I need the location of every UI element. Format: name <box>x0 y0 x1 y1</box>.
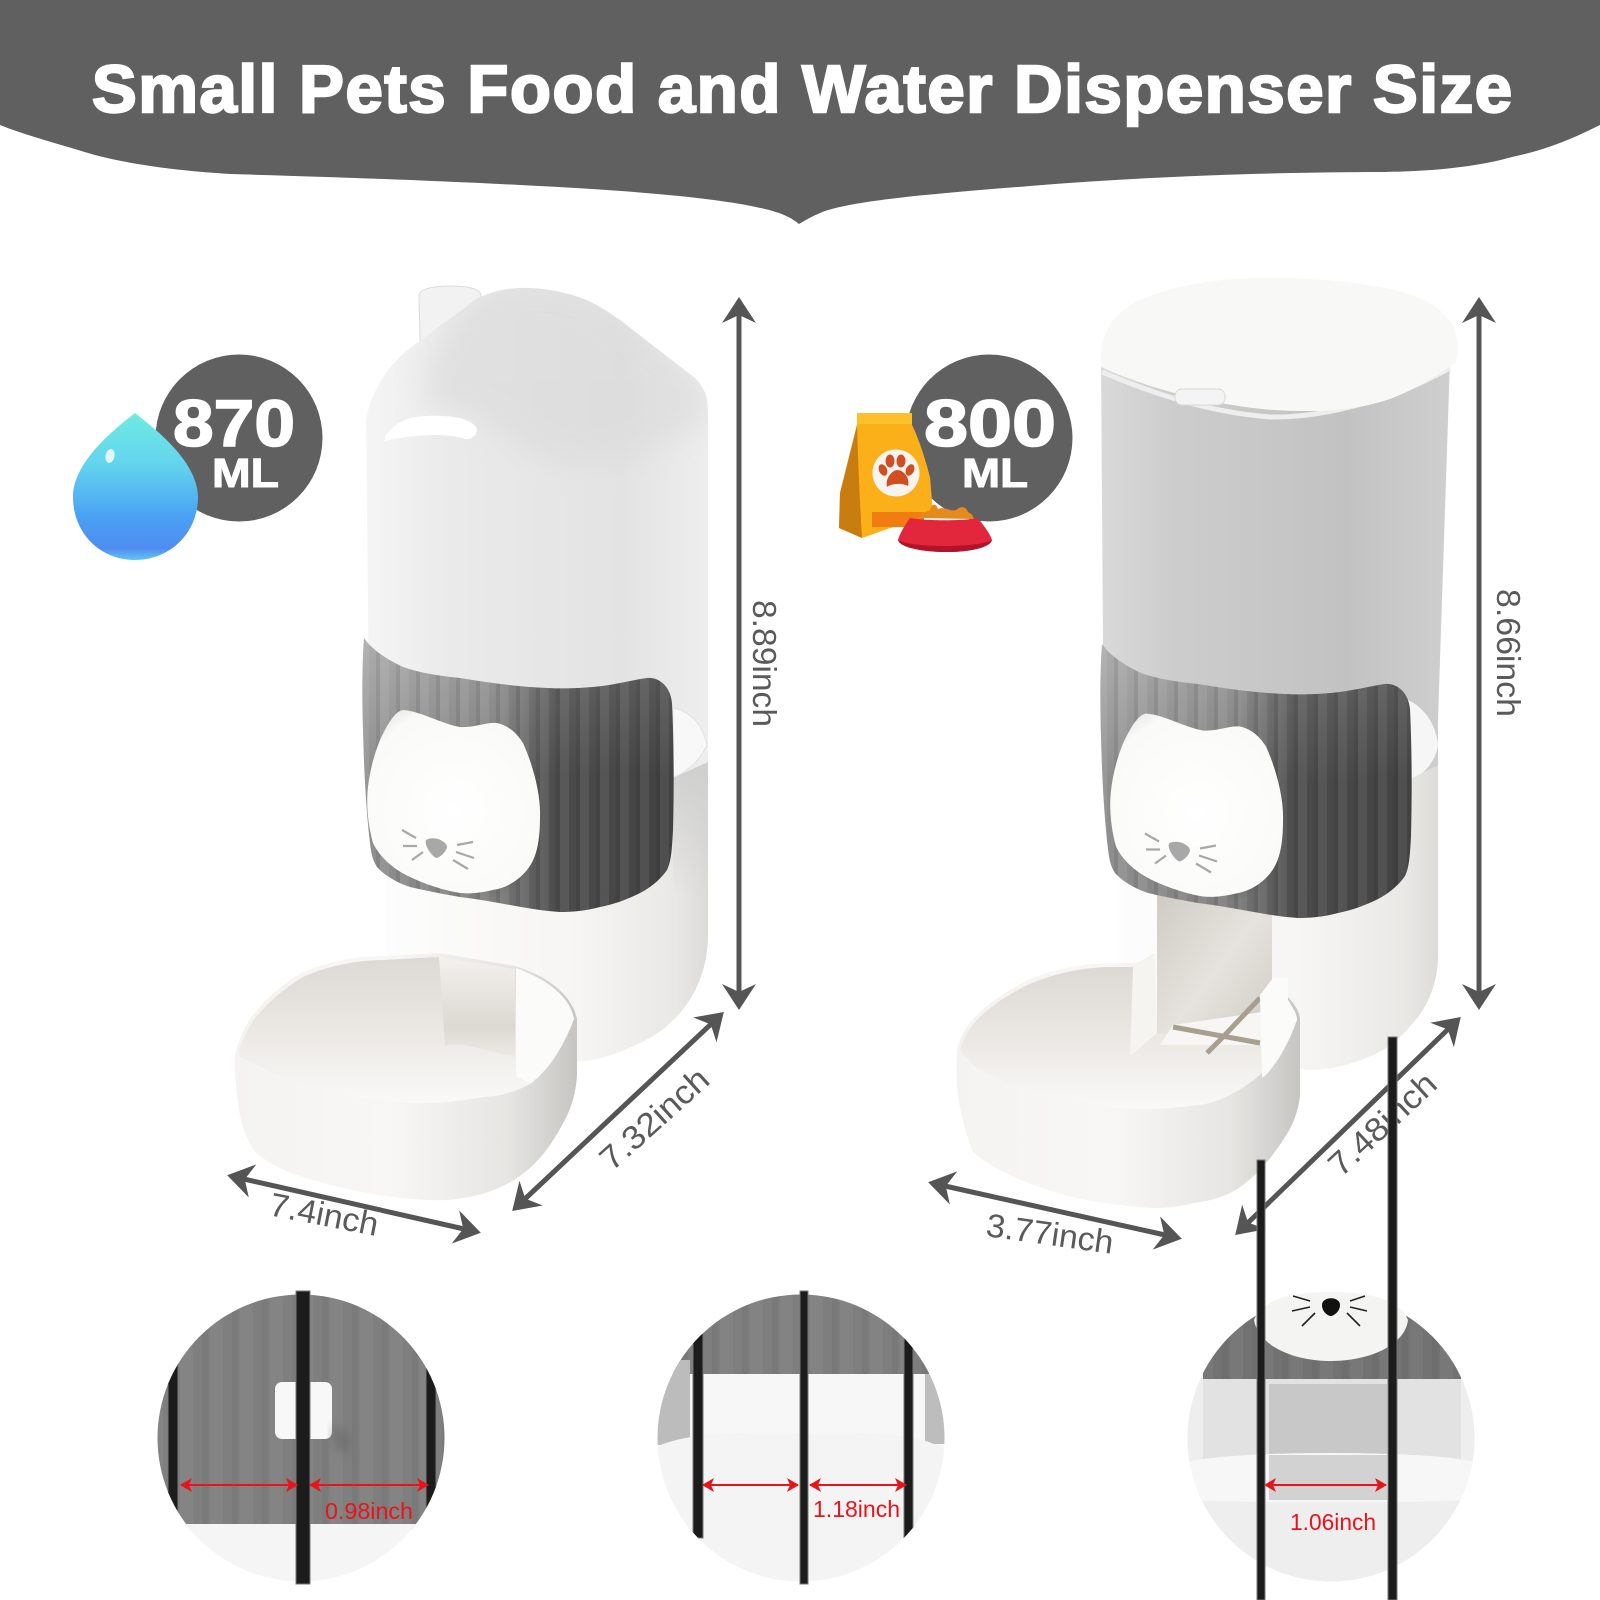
cat head <box>1110 714 1283 897</box>
glass lower right <box>1408 700 1438 782</box>
label: 7.32inch: 7.32inch <box>592 1060 716 1177</box>
label: 8.89inch: 8.89inch <box>746 600 783 727</box>
food capacity badge <box>839 354 1072 552</box>
mount clip <box>275 1382 332 1439</box>
red measure arrows <box>703 1484 906 1486</box>
cat whiskers <box>402 830 474 869</box>
icon: red food bowl <box>898 505 992 552</box>
label: 1.06inch: 1.06inch <box>1290 1509 1376 1535</box>
bowl inner <box>238 957 574 1103</box>
detail circle: bowl slot <box>650 1290 960 1590</box>
silicone band <box>362 638 674 912</box>
arrow: width water dispenser <box>235 1177 473 1231</box>
food container <box>1101 360 1450 790</box>
icon: pet food bag <box>839 413 992 552</box>
lid latch <box>1175 389 1225 405</box>
cat nose <box>426 838 447 858</box>
capacity value 800: 800 <box>924 386 1056 460</box>
label: 0.98inch: 0.98inch <box>325 1498 413 1524</box>
lid <box>1101 278 1458 411</box>
glass window at right <box>673 708 707 778</box>
title: Small Pets Food and Water Dispenser Size <box>92 52 1512 127</box>
label: 3.77inch: 3.77inch <box>984 1206 1116 1261</box>
label: 7.48inch: 7.48inch <box>1321 1065 1444 1183</box>
bowl back spout wall <box>439 957 515 1056</box>
icon: water drop <box>73 413 198 560</box>
header banner <box>0 0 1600 224</box>
label: 7.4inch: 7.4inch <box>267 1186 382 1243</box>
label: 8.66inch: 8.66inch <box>1490 589 1527 717</box>
bottle tank <box>366 288 708 790</box>
base body <box>386 762 708 1062</box>
chute floor <box>1160 1012 1262 1045</box>
base body <box>1116 765 1438 1070</box>
detail circle: wall mount <box>158 1290 444 1584</box>
capacity value 870: 870 <box>173 386 295 460</box>
red measure arrows <box>181 1484 428 1486</box>
water capacity badge <box>73 354 322 560</box>
feeding bowl <box>235 953 577 1200</box>
bowl back wall panel <box>1130 955 1157 1056</box>
arrow: height food dispenser <box>1476 305 1482 1002</box>
lid rim <box>1102 368 1450 417</box>
red measure arrow <box>1265 1484 1386 1486</box>
cat head <box>367 710 540 893</box>
detail circle: food chute <box>1185 1290 1485 1590</box>
product: food dispenser <box>956 278 1458 1208</box>
feeding bowl <box>956 953 1300 1208</box>
arrow: depth water dispenser <box>518 1018 718 1206</box>
label: 1.18inch: 1.18inch <box>813 1496 900 1522</box>
spout <box>419 286 481 345</box>
cat face close-up <box>1254 1292 1408 1361</box>
long black measure lines <box>1257 1037 1397 1600</box>
unit ML: ML <box>962 450 1028 496</box>
unit ML: ML <box>212 450 279 496</box>
product: water dispenser <box>235 285 710 1200</box>
tank highlight <box>385 416 477 441</box>
base side shading <box>673 762 708 900</box>
arrow: width food dispenser <box>936 1184 1174 1237</box>
food chute window <box>1157 895 1272 1050</box>
bowl right inner panel <box>1260 978 1297 1078</box>
cat nose <box>1169 842 1190 862</box>
tank dome shade <box>436 304 702 428</box>
bowl inner <box>960 967 1297 1109</box>
silicone band <box>1100 644 1412 918</box>
arrow: height water dispenser <box>736 305 742 1002</box>
cat whiskers <box>1145 834 1217 872</box>
bowl right inner panel <box>516 968 574 1084</box>
arrow: depth food dispenser <box>1241 1022 1455 1230</box>
chute lever <box>1173 998 1260 1053</box>
